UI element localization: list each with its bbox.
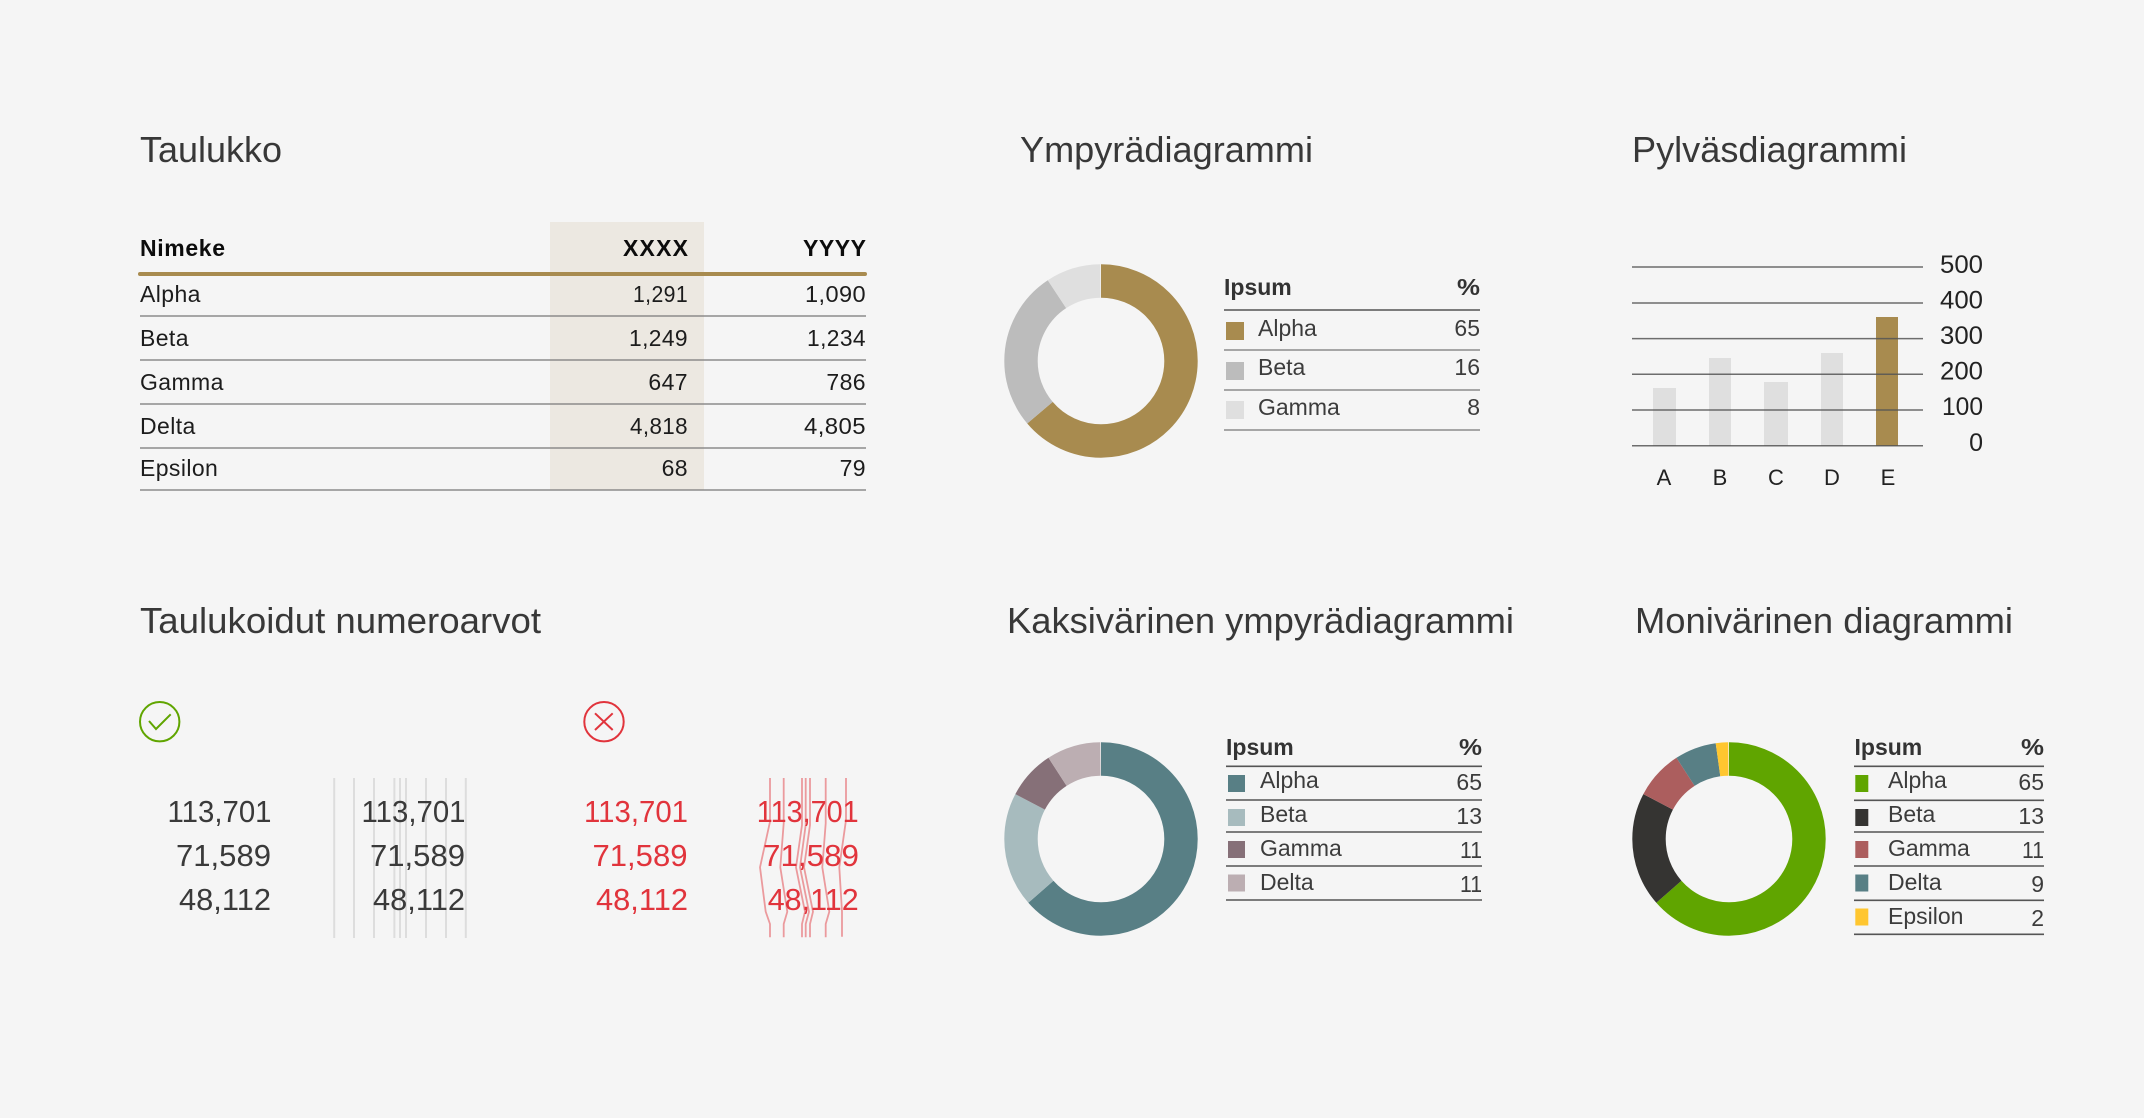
heading: Monivärinen diagrammi: Monivärinen diagrammi [1635,600,2013,641]
donut chart: multi-colour [1649,759,1809,919]
red numbers with wavy guide lines: 71,589 [763,838,859,873]
panel: tabular numerals [140,600,859,938]
row: Alpha: 1,291 [633,281,688,307]
legend table: Alpha [1888,767,1947,793]
panel: multi-colour chart [1635,600,2044,934]
table header row [140,235,866,261]
aligned numbers with straight guide lines [334,778,466,938]
legend table: Ipsum [1224,274,1292,300]
row: Delta: 4,805 [804,413,866,439]
aligned numbers with straight guide lines: 71,589 [370,838,465,873]
y axis labels: 100 [1942,393,1983,421]
legend table: Ipsum [1854,734,1922,760]
icon: green check mark [140,702,179,741]
x axis labels: D [1824,465,1840,490]
misaligned red numbers [584,794,688,917]
legend table: 65 [1456,769,1482,795]
x axis labels: C [1768,465,1784,490]
row: Alpha [140,281,866,316]
red numbers with wavy guide lines: 113,701 [757,794,859,829]
legend table: Beta [1260,801,1308,827]
aligned numbers: 71,589 [176,838,271,873]
row: Gamma [140,369,866,404]
legend table: 13 [1456,803,1482,829]
y axis labels: 500 [1940,251,1983,279]
x axis labels: E [1881,465,1895,490]
row: Gamma: Gamma [140,369,224,395]
row: Alpha: 1,090 [805,281,866,307]
heading: Taulukko: Taulukko [140,129,282,170]
legend table: Gamma [1888,835,1970,861]
legend table: 13 [2018,803,2044,829]
misaligned red numbers: 113,701 [584,794,688,829]
aligned numbers: 48,112 [179,882,271,917]
row: Alpha: Alpha [140,281,201,307]
row: Beta: 1,234 [807,325,866,351]
panel: pie chart [1020,129,1480,441]
bars A to E [1653,317,1898,446]
legend table: 8 [1467,394,1480,420]
legend table [1854,734,2044,934]
donut chart: teal tints [1021,759,1181,919]
legend table: Alpha [1258,315,1317,341]
x axis labels: A [1657,465,1672,490]
row: Beta: Beta [140,325,189,351]
row: Delta: Delta [140,413,196,439]
horizontal grid lines [1632,267,1923,446]
gold header rule [140,272,865,276]
heading: Ympyrädiagrammi: Ympyrädiagrammi [1020,129,1313,170]
row: Epsilon: 79 [840,455,866,481]
legend table: % [1457,274,1480,300]
y axis labels: 0 [1969,429,1983,457]
legend table: 65 [1454,315,1480,341]
legend table: Epsilon [1888,903,1963,929]
highlighted column background [550,222,704,490]
heading: Taulukoidut numeroarvot: Taulukoidut numeroarvot [140,600,541,641]
red numbers with wavy guide lines: 48,112 [768,882,859,917]
table header row: Nimeke [140,235,225,261]
row: Beta [140,325,866,360]
legend table: % [2021,734,2044,760]
legend table [1224,274,1480,430]
legend table: Beta [1888,801,1936,827]
x axis labels: B [1713,465,1727,490]
row: Delta: 4,818 [630,413,688,439]
row: Beta: 1,249 [629,325,688,351]
row: Delta [140,413,866,448]
donut chart: gold [1021,281,1181,441]
legend table: Gamma [1260,835,1342,861]
legend table: % [1459,734,1482,760]
legend table: Gamma [1258,394,1340,420]
panel: two-colour pie chart [1007,600,1514,919]
row: Epsilon [140,455,866,490]
aligned numbers [168,794,272,917]
legend table: 9 [2031,871,2044,897]
legend table: 11 [1460,837,1482,863]
legend table: 11 [2022,837,2044,863]
legend table: Beta [1258,354,1306,380]
legend table: 16 [1454,354,1480,380]
y axis labels: 200 [1940,358,1983,386]
aligned numbers with straight guide lines: 48,112 [373,882,465,917]
legend table: 11 [1460,871,1482,897]
legend table [1226,734,1482,900]
legend table: Delta [1260,869,1314,895]
x axis labels [1657,465,1895,490]
red numbers with wavy guide lines [757,778,859,937]
row: Epsilon: 68 [662,455,688,481]
table header row: YYYY [803,235,866,261]
legend table: Ipsum [1226,734,1294,760]
row: Gamma: 786 [826,369,866,395]
heading: Pylväsdiagrammi: Pylväsdiagrammi [1632,129,1907,170]
table header row: XXXX [623,235,689,261]
row: Gamma: 647 [648,369,688,395]
y axis labels: 300 [1940,322,1983,350]
y axis labels [1940,251,1983,457]
heading: Kaksivärinen ympyrädiagrammi: Kaksivärinen ympyrädiagrammi [1007,600,1514,641]
misaligned red numbers: 48,112 [596,882,688,917]
legend table: Alpha [1260,767,1319,793]
misaligned red numbers: 71,589 [592,838,688,873]
y axis labels: 400 [1940,286,1983,314]
legend table: 65 [2018,769,2044,795]
icon: red cross [584,702,624,741]
panel: table [140,129,866,490]
legend table: Delta [1888,869,1942,895]
panel: bar chart [1632,129,1983,490]
row: Epsilon: Epsilon [140,455,218,481]
aligned numbers: 113,701 [168,794,272,829]
aligned numbers with straight guide lines: 113,701 [362,794,466,829]
legend table: 2 [2031,905,2044,931]
